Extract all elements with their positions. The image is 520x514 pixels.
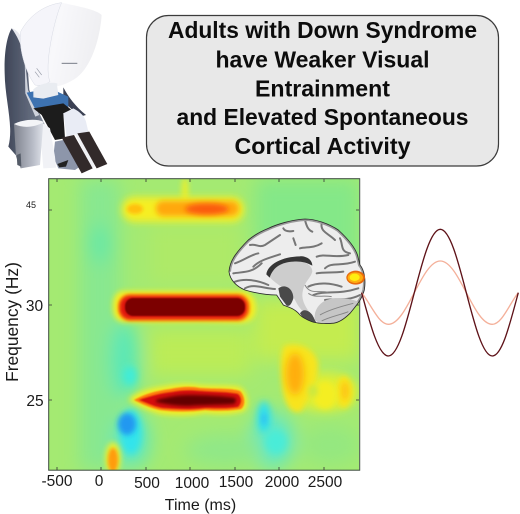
x axis tick labels: 1500	[219, 474, 254, 491]
sine waves: entrainment amplitude comparison	[362, 229, 518, 356]
title text	[168, 17, 477, 159]
dark wave	[362, 229, 518, 356]
time-frequency heatmap	[49, 177, 360, 474]
title text: Adults with Down Syndrome	[168, 17, 477, 43]
icon: sagittal brain with occipital activation	[229, 219, 365, 325]
title text: have Weaker Visual	[216, 46, 430, 72]
late warm blobs	[281, 344, 359, 412]
title text: Entrainment	[255, 76, 390, 102]
x axis tick labels: 2500	[308, 474, 343, 491]
title text: Cortical Activity	[234, 133, 411, 159]
plot frame and ticks	[49, 179, 360, 470]
corpus callosum	[266, 256, 312, 278]
warm blob near 0 ms	[105, 442, 121, 474]
x axis tick labels: -500	[41, 473, 73, 490]
title text: and Elevated Spontaneous	[176, 104, 468, 130]
background tone variation	[80, 179, 360, 470]
x axis tick labels: 0	[95, 473, 104, 490]
y axis label: Frequency (Hz)	[2, 262, 22, 382]
brainstem and cerebellum	[278, 286, 293, 306]
x axis tick labels	[41, 473, 343, 492]
cortical rim	[230, 220, 364, 303]
y axis tick labels	[26, 200, 44, 410]
cortical folds	[233, 220, 360, 300]
30 Hz band	[113, 291, 256, 323]
activation hotspot	[346, 271, 365, 285]
x axis label: Time (ms)	[165, 497, 236, 514]
brain outline	[229, 219, 365, 324]
25 Hz band	[129, 384, 247, 415]
light wave	[362, 261, 518, 324]
cool blobs	[118, 366, 287, 455]
y axis tick labels: 30	[26, 298, 43, 315]
x axis tick labels: 1000	[175, 475, 210, 492]
deep grey matter	[269, 261, 315, 318]
y axis tick labels: 25	[26, 393, 44, 410]
x axis tick labels: 2000	[265, 474, 300, 491]
icon: MEG scanner chair	[5, 3, 107, 173]
title box	[146, 16, 498, 166]
45 Hz band	[122, 177, 244, 222]
y axis tick labels: 45	[26, 200, 36, 210]
x axis tick labels: 500	[134, 475, 160, 492]
